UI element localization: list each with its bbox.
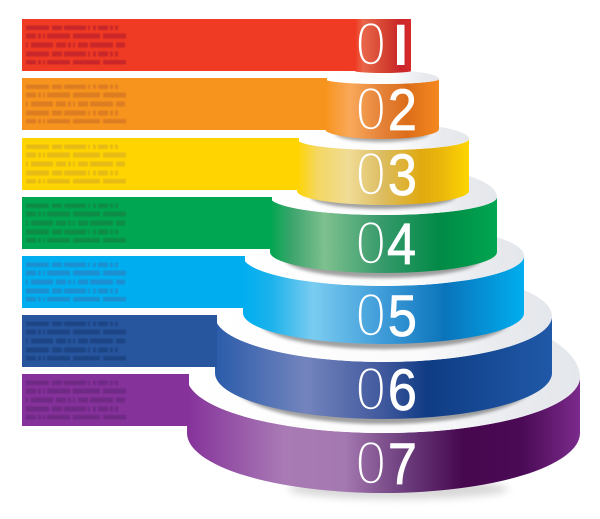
number 07: 7 [388, 431, 417, 497]
placeholder text block 01 [26, 28, 126, 62]
number 06: 6 [388, 357, 417, 423]
number 01: 1 [383, 13, 415, 78]
bar 06 [22, 315, 217, 367]
level 05: blue disc and bar [22, 224, 524, 349]
number 06: 0 [356, 355, 386, 424]
level 02: orange disc and bar [22, 70, 439, 142]
bar 01 [22, 19, 356, 71]
placeholder text block 05 [26, 264, 126, 300]
bar 07 [22, 374, 189, 426]
placeholder text block 04 [26, 206, 126, 240]
placeholder text block 06 [26, 324, 126, 358]
number 05: 0 [356, 281, 386, 350]
level 04: green disc and bar [22, 165, 497, 278]
level 07: purple disc and bar [22, 305, 580, 499]
placeholder text block 07 [26, 382, 126, 418]
number 04: 4 [387, 211, 416, 277]
number 05: 5 [388, 283, 417, 349]
bar 02 [22, 78, 327, 130]
level 06: navy disc and bar [22, 269, 552, 424]
placeholder text block 02 [26, 86, 126, 122]
level 03: yellow disc and bar [22, 123, 469, 209]
number 02: 2 [388, 77, 417, 143]
bar 04 [22, 197, 272, 249]
number 07: 0 [356, 429, 386, 498]
number 01 [358, 23, 404, 65]
placeholder text block 03 [26, 146, 126, 182]
number 03: 0 [356, 140, 386, 209]
number 02: 0 [356, 75, 386, 144]
bar 03 [22, 138, 299, 190]
bar 05 [22, 256, 245, 308]
number 01: 0 [356, 10, 386, 79]
level 01: red block and bar [22, 19, 411, 73]
number 03: 3 [388, 142, 417, 208]
number 04: 0 [356, 209, 386, 278]
